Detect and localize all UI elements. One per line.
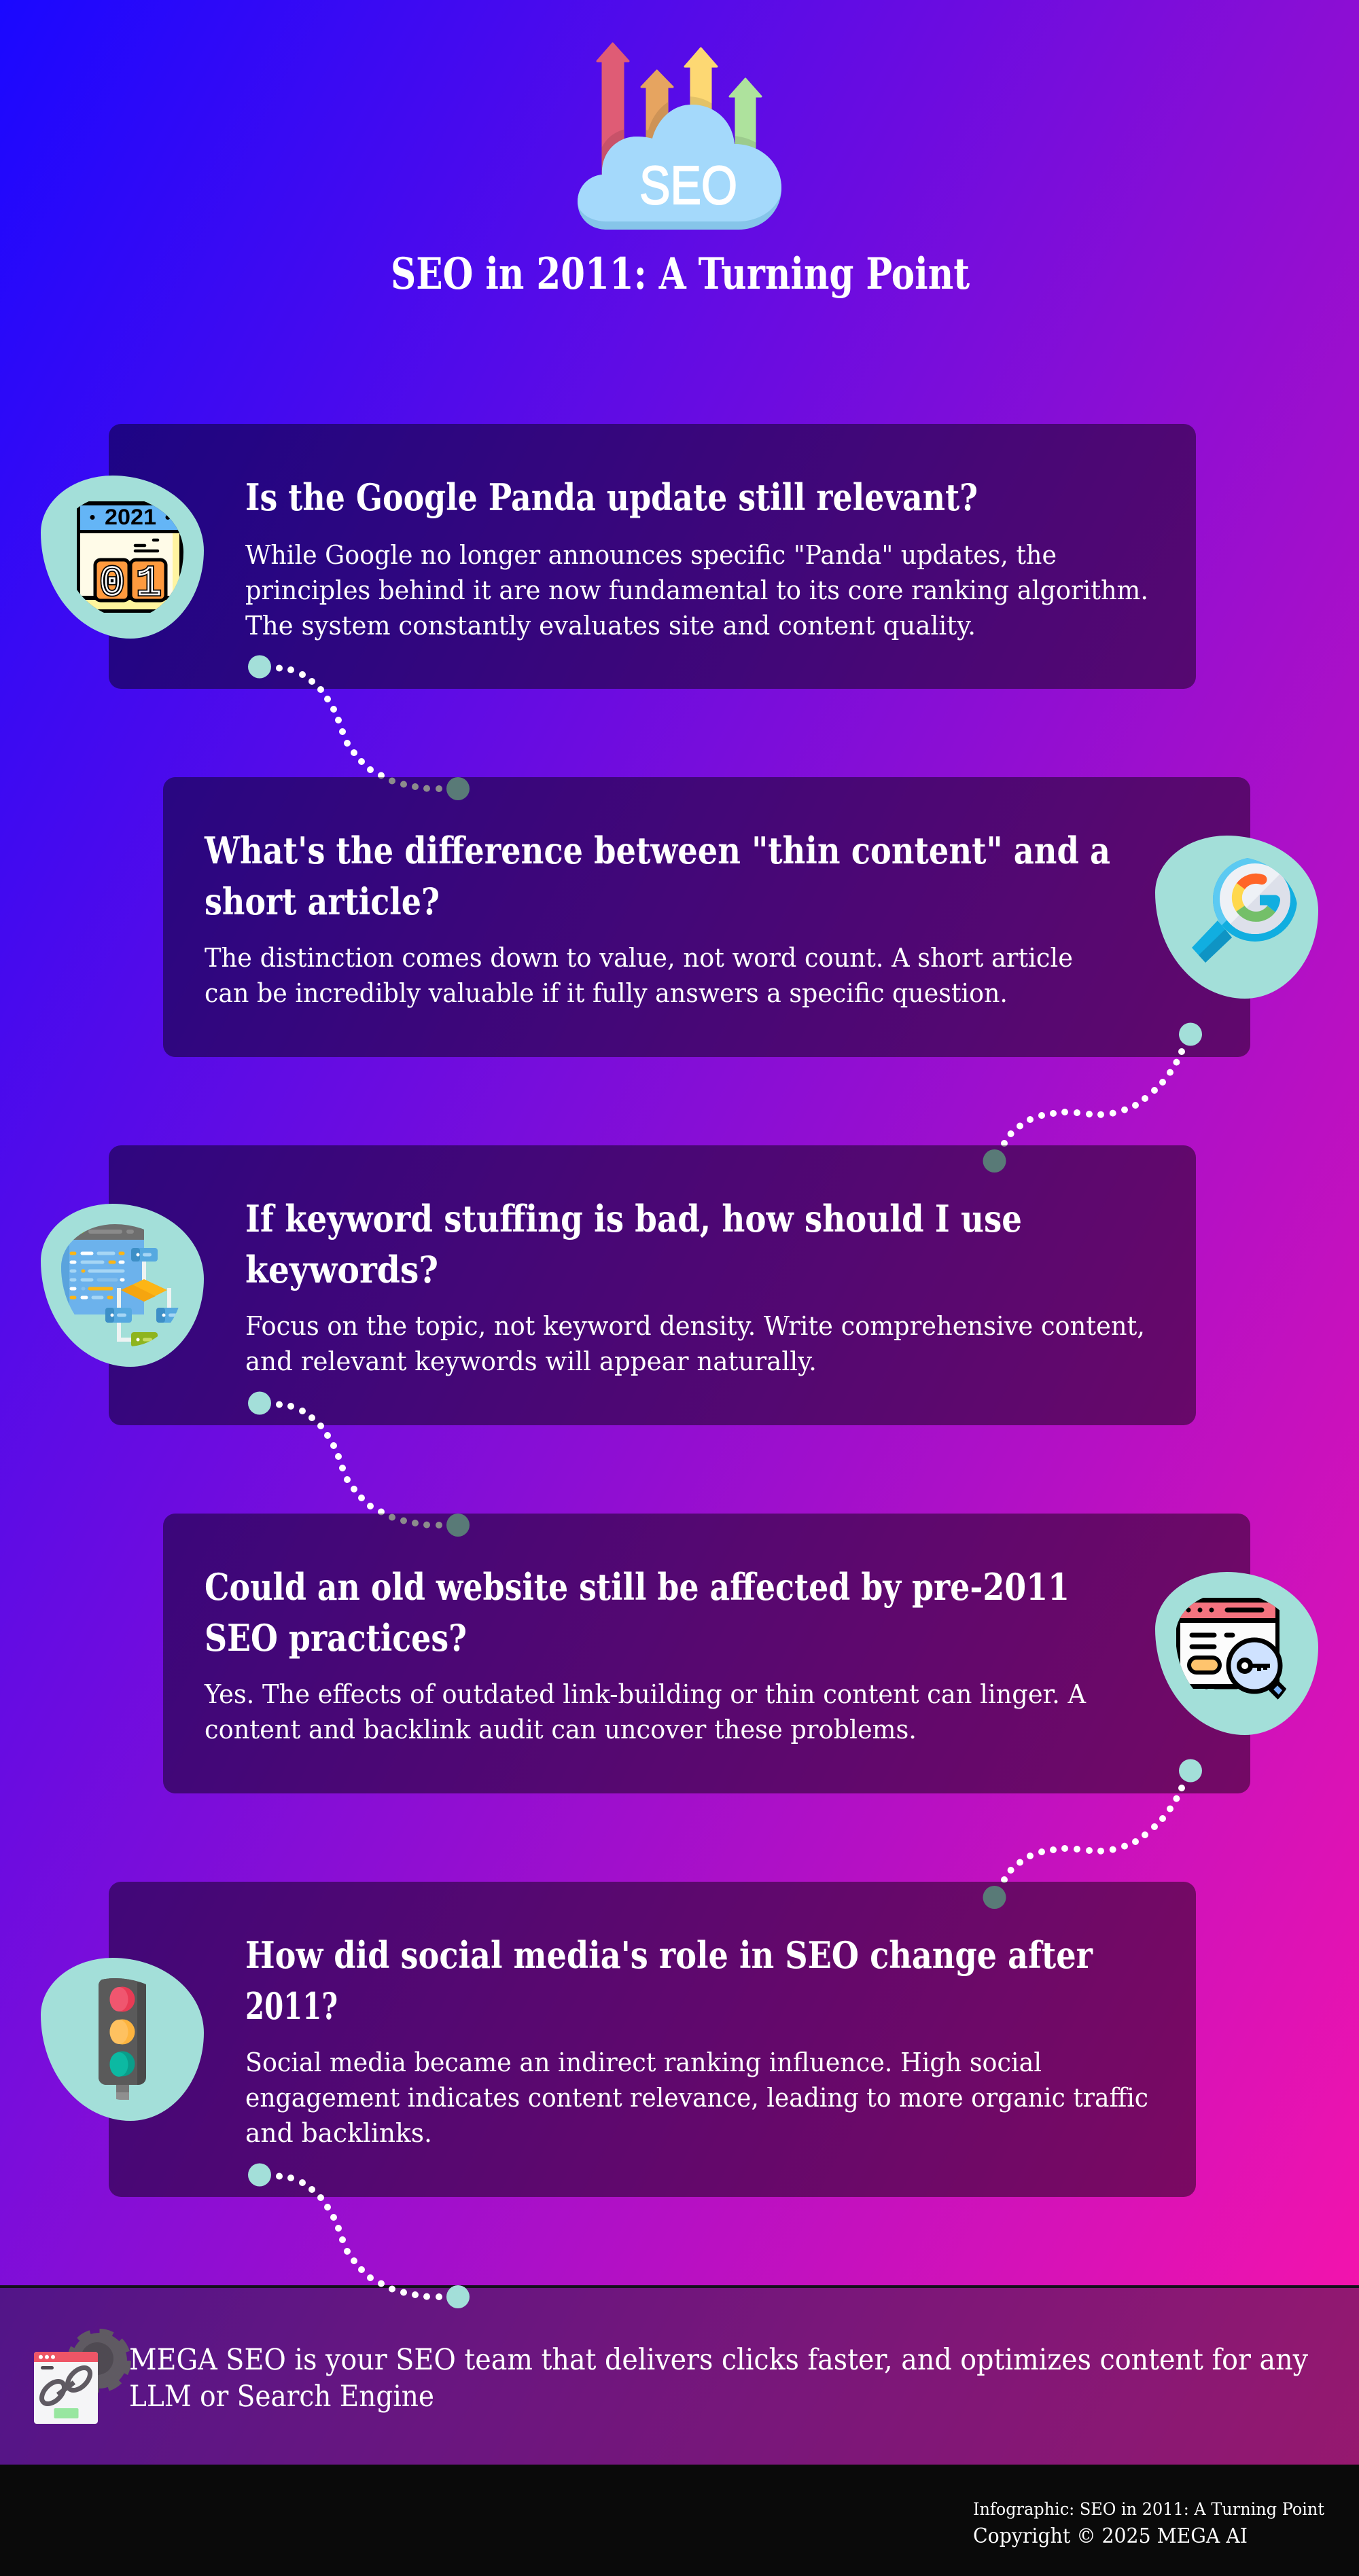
icon: red arrow [597,43,629,190]
icon: key search window blob [1155,1572,1318,1735]
icon: calendar blob [41,476,204,639]
copyright: Copyright © 2025 MEGA AI [973,2524,1248,2548]
heading: short article? [205,880,440,923]
heading: If keyword stuffing is bad, how should I use [245,1197,1022,1240]
heading: 2011? [245,1984,338,2028]
icon: green arrow [730,79,761,170]
panel: promo band [0,2285,1359,2465]
footer [0,2465,1359,2576]
heading [245,1197,1022,1291]
heading: What's the difference between "thin content" and a [204,829,1110,872]
arrow: dotted connector 4 [983,1759,1202,1909]
arrow: dotted connector 3 [248,1391,470,1537]
panel: thin content [163,777,1250,1057]
text block: Social media became an indirect ranking influence. High social [245,2047,1042,2078]
text block: principles behind it are now fundamental to its core ranking algorithm. [245,575,1148,606]
text block [245,2047,1148,2149]
promo text [129,2343,1309,2414]
icon: calendar blob: 1 [137,561,161,607]
logo text: SEO [639,155,737,215]
icon: chain link page with gear [34,2331,128,2424]
heading: Is the Google Panda update still relevant? [245,476,978,519]
text block [245,1311,1145,1377]
heading: SEO practices? [205,1616,467,1660]
text block: content and backlink audit can uncover these problems. [205,1715,917,1745]
logo: SEO cloud with rising arrows [573,43,781,230]
text block: and backlinks. [245,2118,432,2149]
text block: The distinction comes down to value, not word count. A short article [205,943,1073,973]
panel: social media [109,1882,1196,2197]
title: SEO in 2011: A Turning Point [391,249,970,300]
text block: and relevant keywords will appear naturally. [245,1346,817,1377]
icon: Google magnifier blob [1155,836,1318,999]
text block: Focus on the topic, not keyword density. Write comprehensive content, [245,1311,1145,1342]
icon: code flowchart blob [41,1204,204,1367]
text block: engagement indicates content relevance, leading to more organic traffic [245,2083,1148,2113]
icon: traffic light blob [41,1958,204,2121]
arrow: dotted connector 2 [983,1023,1202,1173]
icon: calendar blob: 0 [100,561,124,607]
icon: orange arrow [641,71,673,177]
text block: can be incredibly valuable if it fully answers a specific question. [205,978,1008,1009]
heading: Could an old website still be affected by pre-2011 [205,1565,1070,1609]
icon: calendar blob: 0 [100,561,124,607]
heading [204,829,1110,923]
text block: Yes. The effects of outdated link-building or thin content can linger. A [204,1679,1087,1710]
heading [205,1565,1070,1660]
heading: How did social media's role in SEO change after [245,1933,1093,1977]
promo text: LLM or Search Engine [129,2380,434,2414]
text block [204,1679,1087,1745]
arrow: dotted connector 5 [248,2163,470,2308]
footer caption: Infographic: SEO in 2011: A Turning Point [973,2499,1324,2519]
icon: calendar blob: 1 [137,561,161,607]
text block: While Google no longer announces specific "Panda" updates, the [245,540,1057,571]
icon: cloud [578,105,781,230]
icon: calendar blob: 2021 [105,505,156,529]
text block [205,943,1073,1009]
heading [245,1933,1093,2028]
text block: The system constantly evaluates site and content quality. [245,611,976,641]
heading: keywords? [245,1248,438,1291]
panel: Google Panda [109,424,1196,689]
panel: keyword stuffing [109,1145,1196,1425]
text block [245,540,1148,641]
arrow: dotted connector 1 [248,655,470,800]
panel: old website [163,1514,1250,1793]
icon: yellow arrow [685,48,717,143]
